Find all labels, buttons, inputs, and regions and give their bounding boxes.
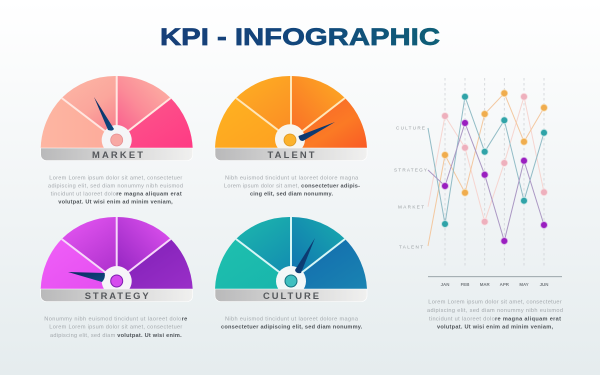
chart description: volutpat. Ut wisi enim ad minim veniam,	[437, 324, 553, 330]
culture label bar: CULTURE	[263, 290, 319, 301]
month labels: APR	[500, 282, 510, 287]
strategy label bar	[41, 289, 193, 302]
market description: adipiscing elit, sed diam nonummy nibh euismod	[48, 184, 183, 190]
month labels: JUN	[540, 282, 548, 287]
strategy label bar: STRATEGY	[85, 290, 149, 301]
strategy description: adipiscing elit, sed diam volutpat. Ut wisi enim.	[50, 333, 182, 339]
strategy description: Lorem Lorem ipsum dolor sit amet, consectetuer	[49, 325, 182, 331]
strategy needle	[68, 272, 105, 282]
talent gauge segments	[215, 76, 367, 148]
culture hub	[276, 266, 306, 289]
strategy description	[44, 316, 187, 339]
month labels: FEB	[461, 282, 469, 287]
talent hub	[275, 124, 305, 148]
panel: strategy gauge	[41, 217, 193, 302]
culture description: consectetuer adipiscing elit, sed diam nonummy.	[221, 325, 363, 331]
title: KPI - INFOGRAPHIC	[160, 24, 440, 51]
talent description	[224, 175, 360, 198]
market label bar	[41, 148, 193, 160]
market gauge segments	[41, 76, 193, 148]
market description: tincidunt ut laoreet dolore magna aliquam erat	[51, 192, 182, 198]
market label bar: MARKET	[92, 149, 143, 160]
month labels	[441, 282, 548, 287]
talent description: Lorem ipsum dolor sit amet, consectetuer adipis-	[224, 184, 360, 190]
chart description: adipiscing elit, sed diam nonummy nibh euismod	[427, 308, 563, 314]
month labels: MAR	[480, 282, 491, 287]
chart description: tincidunt ut laoreet dolore magna aliquam erat	[429, 316, 561, 322]
market needle	[94, 97, 114, 131]
series: talent	[428, 90, 547, 246]
category labels	[394, 126, 427, 250]
series: market	[428, 93, 547, 225]
market description: volutpat. Ut wisi enim ad minim veniam,	[58, 200, 173, 206]
talent description: Nibh euismod tincidunt ut laoreet dolore magna	[225, 175, 359, 181]
series: strategy	[428, 120, 547, 244]
category labels: STRATEGY	[394, 168, 427, 173]
chart description	[427, 300, 563, 330]
talent label bar: TALENT	[268, 149, 315, 160]
panel: talent gauge	[215, 76, 367, 160]
talent label bar	[215, 148, 367, 160]
panel: market gauge	[41, 76, 193, 160]
category labels: CULTURE	[396, 126, 425, 131]
category labels: TALENT	[399, 245, 423, 250]
strategy description: Nonummy nibh euismod tincidunt ut laoreet dolore	[44, 316, 187, 322]
series: culture	[428, 93, 547, 227]
culture description	[221, 316, 363, 331]
market description: Lorem Lorem ipsum dolor sit amet, consectetuer	[49, 175, 182, 181]
talent description: cing elit, sed diam nonummy.	[250, 192, 333, 198]
culture label bar	[215, 289, 367, 302]
panel: culture gauge	[215, 217, 367, 302]
strategy hub	[102, 266, 132, 289]
category labels: MARKET	[398, 204, 424, 209]
month labels: JAN	[441, 282, 449, 287]
market description	[48, 175, 183, 206]
month labels: MAY	[519, 282, 529, 287]
market hub	[102, 125, 132, 148]
line chart	[394, 78, 562, 287]
culture gauge segments	[215, 217, 367, 289]
culture needle	[295, 238, 315, 273]
strategy gauge segments	[41, 217, 193, 289]
culture description: Nibh euismod tincidunt ut laoreet dolore magna	[225, 316, 359, 322]
chart description: Lorem Lorem ipsum dolor sit amet, consectetuer	[428, 300, 562, 306]
talent needle	[298, 122, 335, 141]
